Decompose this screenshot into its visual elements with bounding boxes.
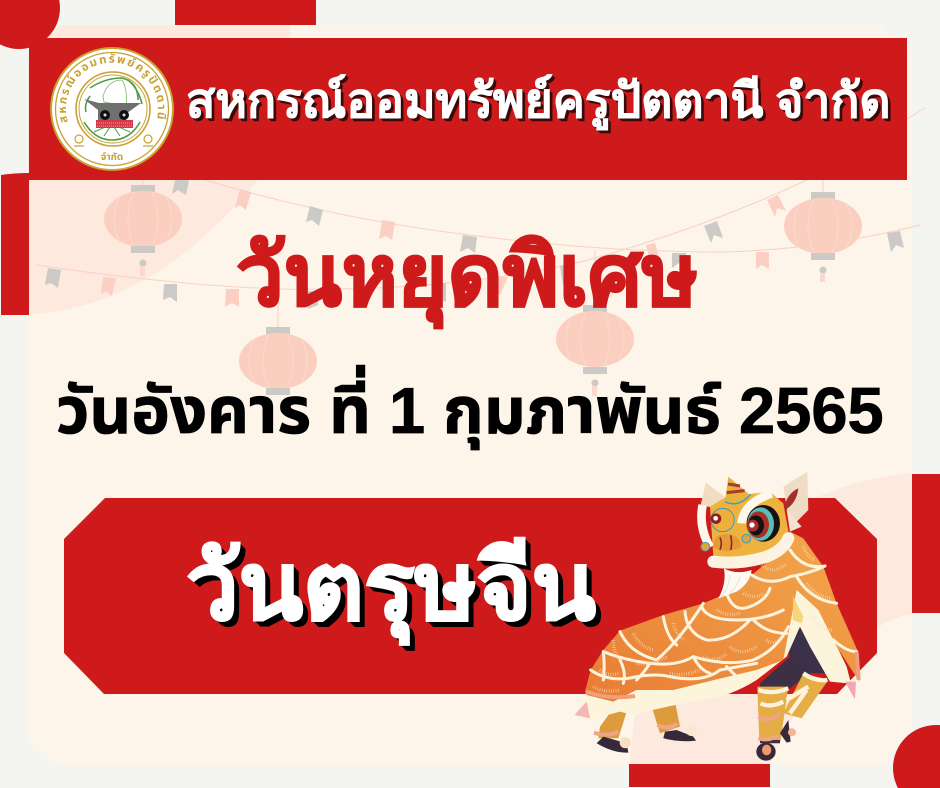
- date line: วันอังคาร ที่ 1 กุมภาพันธ์ 2565: [56, 374, 884, 447]
- lion body scales: [585, 532, 859, 702]
- logo green hills: [84, 78, 142, 140]
- lion head: [701, 472, 808, 598]
- lantern 3: [556, 305, 634, 396]
- red bar left: [1, 173, 29, 315]
- horn: [725, 477, 750, 503]
- red corner circle bottom-right: [893, 725, 940, 788]
- logo cannon: [84, 99, 141, 120]
- white brows and fur: [701, 505, 710, 547]
- holiday name: วันตรุษจีน: [186, 536, 596, 640]
- lion scale hatching: [593, 547, 833, 691]
- logo: [50, 47, 174, 171]
- heading: special holiday: วันหยุดพิเศษ: [236, 230, 698, 324]
- date panel: [64, 498, 877, 694]
- red bar top: [175, 0, 316, 25]
- peach corner top-left: [28, 25, 290, 314]
- red corner circle top-left: [0, 0, 60, 49]
- red bar bottom: [629, 764, 770, 787]
- logo ring text: สหกรณ์ออมทรัพย์ครูปัตตานี: [60, 53, 166, 122]
- left eye: [711, 508, 734, 532]
- lantern 1: [104, 185, 182, 276]
- logo badges: [74, 135, 153, 146]
- ears: [701, 483, 727, 510]
- header banner: [29, 38, 907, 180]
- red bar right: [912, 474, 940, 613]
- lion yellow chest: [793, 597, 803, 623]
- lion scale ridges: [591, 550, 857, 683]
- lantern 4: [784, 192, 862, 282]
- right eye: [747, 505, 780, 542]
- bunting strings: [37, 108, 925, 327]
- logo lower text: จำกัด: [101, 151, 123, 163]
- bunting flags: [45, 180, 904, 309]
- lion legs and shoes: [594, 627, 830, 761]
- header title: สหกรณ์ออมทรัพย์ครูปัตตานี จำกัด: [186, 75, 891, 128]
- lantern 2: [239, 327, 317, 395]
- lion cream skirt: [575, 570, 855, 722]
- face: [710, 492, 790, 563]
- mouth fur: [713, 538, 788, 563]
- beard: [718, 568, 752, 598]
- logo red abacus: [96, 120, 133, 128]
- nose: [713, 534, 742, 552]
- peach swoosh bottom-right: [630, 473, 912, 764]
